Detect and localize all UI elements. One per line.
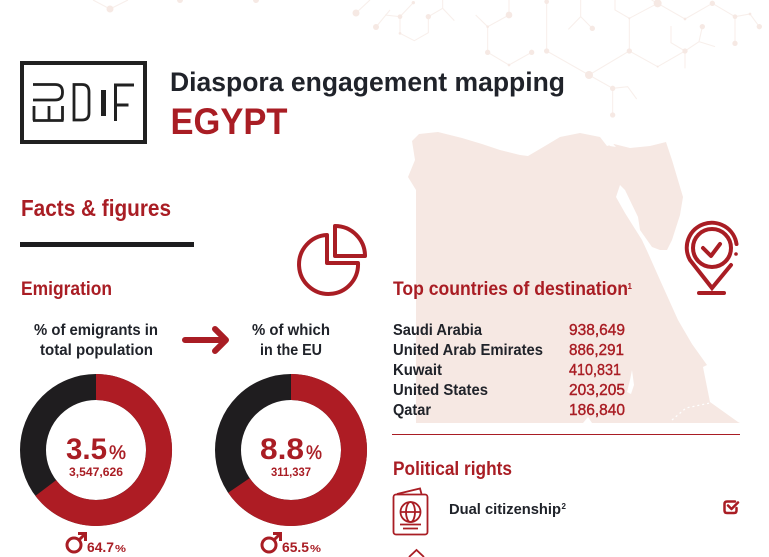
male share: total population <box>67 534 126 555</box>
table: top destination countries: 938,649 <box>569 322 625 339</box>
divider bar under heading <box>20 242 194 247</box>
label: % of which in the EU <box>252 322 330 359</box>
title: country name: EGYPT <box>170 100 288 142</box>
donut chart: emigrants in total population: % <box>109 443 126 464</box>
donut chart: emigrants in total population: 3.5 <box>66 433 107 466</box>
divider line <box>392 434 740 435</box>
table: top destination countries: 203,205 <box>569 382 625 399</box>
table: top destination countries: 186,840 <box>569 402 625 419</box>
male share: EU: 65.5 <box>282 539 309 555</box>
label: % of which in the EU: in the EU <box>260 342 322 359</box>
heading: Facts & figures: Facts & figures <box>21 195 171 221</box>
donut chart: emigrants in the EU: 8.8 <box>260 433 304 466</box>
label: % of emigrants in total population: total population <box>40 342 153 359</box>
male share: total population: % <box>115 544 126 555</box>
label: % of emigrants in total population <box>34 322 158 359</box>
heading: Political rights: Political rights <box>393 459 512 480</box>
heading: Top countries of destination: 1 <box>628 282 632 291</box>
title: Diaspora engagement mapping: Diaspora engagement mapping <box>170 67 565 97</box>
donut chart: emigrants in total population <box>33 387 159 513</box>
table: top destination countries: Saudi Arabia <box>393 322 482 339</box>
label: % of emigrants in total population: % of emigrants in <box>34 322 158 339</box>
table: top destination countries <box>393 322 625 419</box>
donut chart: emigrants in the EU: % <box>306 443 322 464</box>
table: top destination countries: Kuwait <box>393 362 442 379</box>
heading: Emigration: Emigration <box>21 279 112 300</box>
label: Dual citizenship: Dual citizenship <box>449 501 561 518</box>
male share: total population: 64.7 <box>87 539 114 555</box>
male share: EU <box>262 534 321 555</box>
heading: Top countries of destination: Top countries of destination <box>393 279 628 300</box>
table: top destination countries: 886,291 <box>569 342 624 359</box>
logo: EUDiF <box>22 63 145 142</box>
male share: EU: % <box>310 544 321 555</box>
table: top destination countries: United States <box>393 382 488 399</box>
table: top destination countries: 410,831 <box>569 362 621 379</box>
icon: checkbox checked <box>724 502 738 513</box>
table: top destination countries: Qatar <box>393 402 431 419</box>
icon: pie chart <box>299 226 365 294</box>
icon: building roof (cropped) <box>409 550 424 557</box>
icon: location pin with check <box>687 223 738 293</box>
donut chart: emigrants in the EU <box>228 387 354 513</box>
donut chart: emigrants in the EU: 311,337 <box>271 465 311 479</box>
table: top destination countries: United Arab Emirates <box>393 342 543 359</box>
donut chart: emigrants in total population: 3,547,626 <box>69 465 123 479</box>
icon: passport <box>394 488 428 534</box>
arrow <box>185 329 226 351</box>
label: % of which in the EU: % of which <box>252 322 330 339</box>
label: Dual citizenship: 2 <box>562 502 566 511</box>
background: map of Egypt <box>408 132 740 423</box>
